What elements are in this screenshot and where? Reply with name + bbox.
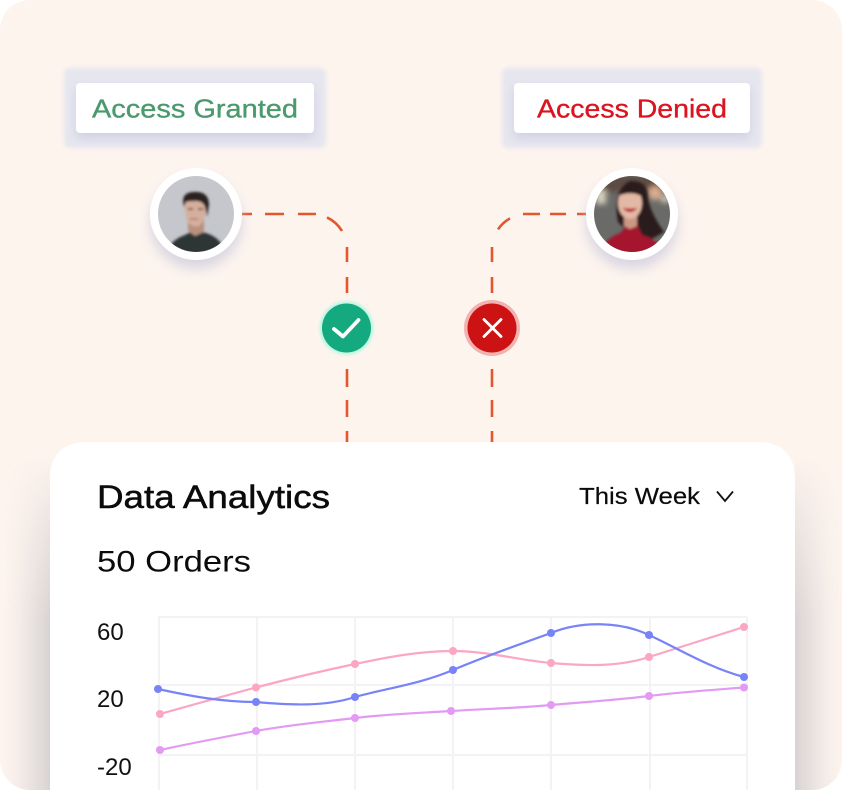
y axis labels: -20	[97, 754, 132, 781]
y axis labels: 20	[97, 686, 124, 713]
label: access granted: Access Granted	[92, 94, 298, 124]
y axis labels: 60	[97, 619, 124, 646]
connector: denied dashed line	[492, 214, 586, 442]
badge: access denied	[502, 68, 762, 148]
heading: data analytics: Data Analytics	[97, 479, 330, 515]
badge: access granted	[64, 68, 326, 148]
series: pink	[156, 623, 748, 718]
series: purple	[156, 684, 748, 754]
dropdown: this week: This Week	[579, 483, 700, 509]
avatar: man	[150, 168, 242, 269]
label: access denied: Access Denied	[537, 94, 727, 124]
chart grid	[158, 617, 747, 790]
connector: granted dashed line	[242, 214, 347, 442]
text: order count: 50 Orders	[97, 546, 251, 578]
panel: data analytics card	[0, 442, 842, 790]
y axis labels	[97, 619, 132, 781]
icon: check badge	[320, 301, 374, 355]
line chart	[97, 617, 748, 790]
avatar: woman	[586, 168, 678, 269]
icon: cross badge	[464, 300, 520, 356]
series: blue	[154, 624, 748, 706]
